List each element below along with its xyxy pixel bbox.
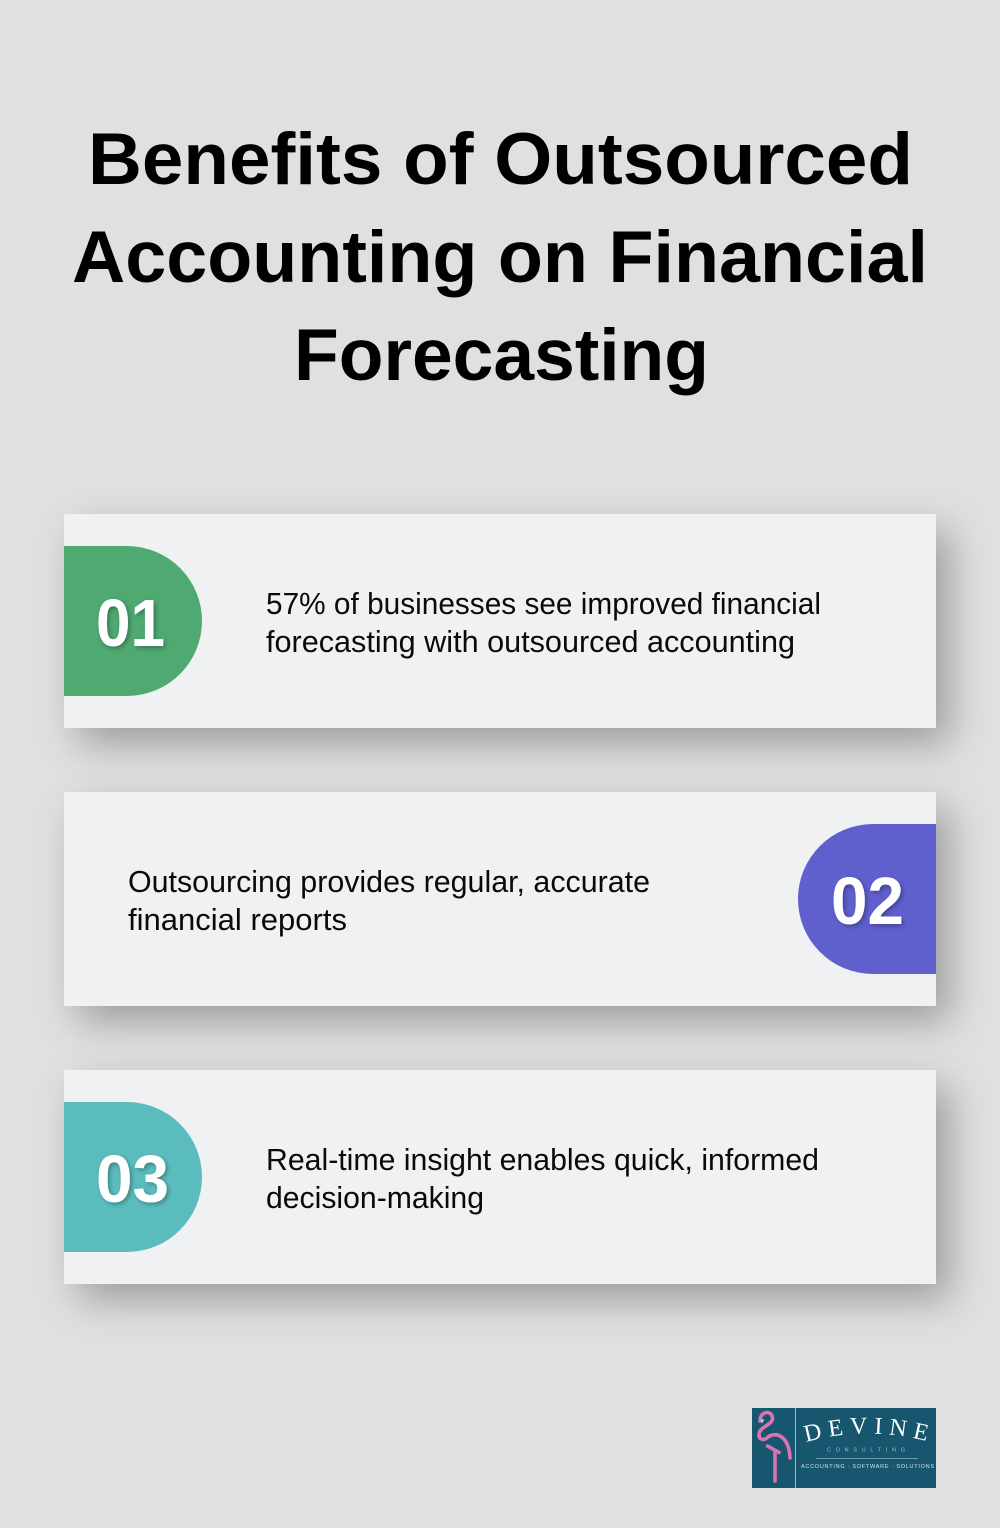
text: benefit 03: [266, 1143, 819, 1215]
badge: 02: 02: [831, 864, 904, 939]
text: tagline: ACCOUNTING · SOFTWARE · SOLUTIONS: [801, 1464, 934, 1470]
title: Benefits of Outsourced: [88, 119, 913, 200]
title: Accounting on Financial: [72, 217, 928, 298]
text: benefit 03: Real-time insight enables quick, informed: [266, 1143, 819, 1177]
panel: benefit 03: [64, 1070, 950, 1300]
badge: 01: 01: [96, 586, 165, 661]
text: benefit 02: [128, 865, 650, 937]
logo: Devine Consulting: [752, 1408, 936, 1488]
badge: 01: [64, 546, 202, 696]
badge: 02: [798, 824, 936, 974]
badge: 03: 03: [96, 1142, 169, 1217]
icon: flamingo: [759, 1412, 790, 1481]
wordmark: DEVINE: DEVINE: [803, 1418, 928, 1442]
title: [72, 119, 928, 396]
text: benefit 01: [266, 587, 821, 659]
text: CONSULTING: CONSULTING: [827, 1448, 905, 1454]
text: benefit 02: Outsourcing provides regular, accurate: [128, 865, 650, 899]
text: benefit 01: forecasting with outsourced accounting: [266, 625, 795, 659]
panel: benefit 02: [64, 792, 950, 1022]
panel: benefit 01: [64, 514, 950, 744]
text: benefit 03: decision-making: [266, 1181, 484, 1215]
text: benefit 02: financial reports: [128, 903, 347, 937]
title: Forecasting: [294, 315, 709, 396]
text: benefit 01: 57% of businesses see improved financial: [266, 587, 821, 621]
badge: 03: [64, 1102, 202, 1252]
